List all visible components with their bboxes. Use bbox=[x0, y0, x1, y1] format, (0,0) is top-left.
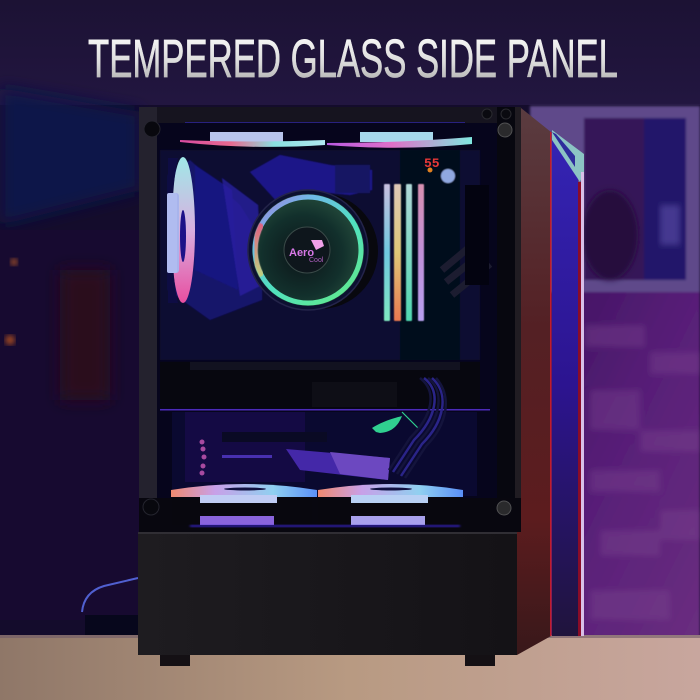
sleeved cables bbox=[389, 378, 446, 478]
top fans bbox=[180, 122, 472, 148]
blue front bezel bbox=[552, 134, 578, 636]
post code display: 55 bbox=[424, 156, 440, 171]
bottom fans bbox=[171, 484, 463, 527]
motherboard lower bbox=[172, 378, 477, 496]
logo bbox=[289, 240, 324, 264]
rog logo bbox=[372, 416, 402, 433]
graphics card bbox=[160, 362, 490, 410]
poster frame and brick wall bbox=[530, 106, 700, 637]
cpu cooler bbox=[248, 190, 378, 310]
logo: Cool bbox=[309, 257, 324, 264]
table top bbox=[0, 635, 700, 700]
panel: tempered glass bbox=[139, 107, 521, 532]
cable at left bbox=[82, 578, 138, 612]
motherboard upper bbox=[160, 150, 480, 360]
side fan bbox=[167, 157, 195, 303]
screws bbox=[143, 109, 512, 515]
case: right side panel bbox=[517, 108, 584, 655]
logo: Aero bbox=[289, 247, 314, 259]
ram sticks bbox=[384, 184, 424, 321]
psu cables right bbox=[442, 185, 490, 295]
case: base bbox=[138, 532, 517, 666]
